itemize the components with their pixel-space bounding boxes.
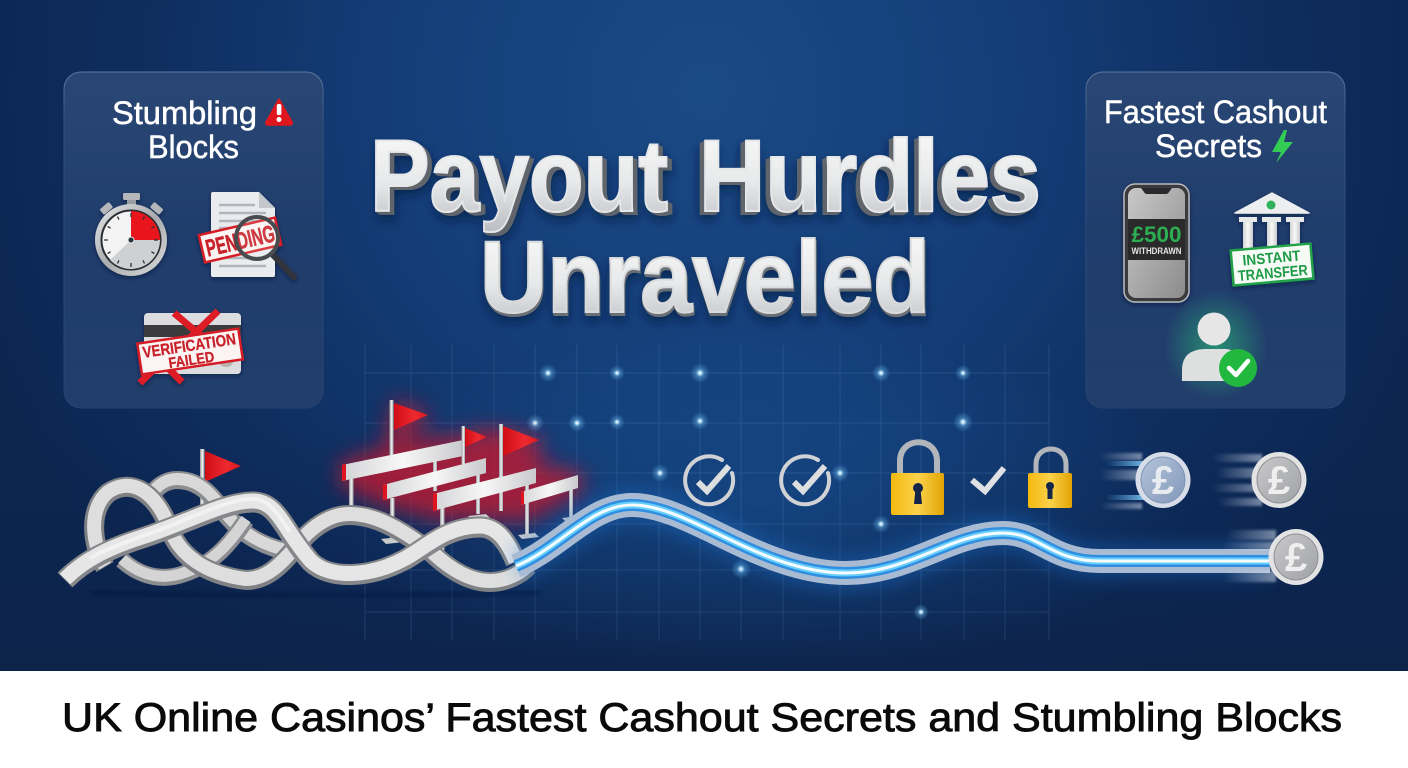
stamp: verification failed — [137, 329, 243, 376]
icon: pound coin silver: £ — [1268, 459, 1290, 503]
hurdle 2 with flag — [381, 426, 490, 544]
caption banner — [0, 671, 1408, 768]
icon: verified user — [1164, 290, 1268, 400]
panel heading: stumbling blocks: Stumbling — [112, 95, 257, 131]
tangled silver ribbon — [65, 449, 540, 596]
icon: pound coin blue — [1100, 452, 1190, 509]
icon: check circle 1 — [685, 456, 733, 504]
hurdles with flags — [342, 400, 581, 553]
red glow behind hurdles — [340, 400, 582, 520]
panel heading: fastest cashout secrets: Fastest Cashout — [1104, 94, 1327, 130]
icon: check mark — [972, 468, 1004, 491]
title: Unraveled — [480, 220, 930, 334]
icon: failed card — [137, 311, 243, 383]
icon: warning triangle — [266, 99, 292, 125]
hurdle 4 — [518, 475, 581, 539]
grid of light lines — [365, 345, 1050, 640]
icon: pound coin silver — [1212, 452, 1306, 508]
icon: pending document with magnifier — [199, 192, 294, 277]
glowing blue path — [516, 505, 1270, 573]
panel: fastest cashout secrets — [1086, 72, 1345, 408]
hurdle 1 with flag — [342, 400, 463, 512]
icon: phone with withdrawal: WITHDRAWN — [1132, 246, 1182, 256]
glowing grid nodes — [526, 363, 973, 620]
icon: lightning bolt — [1272, 130, 1293, 163]
icon: pound coin blue: £ — [1152, 459, 1174, 503]
title: Hurdles — [699, 119, 1041, 233]
panel: stumbling blocks — [64, 72, 323, 408]
icon: pound coin on path — [1222, 529, 1324, 585]
stamp: verification failed: FAILED — [167, 349, 216, 372]
icon: padlock large — [891, 442, 944, 515]
panel heading: fastest cashout secrets: Secrets — [1155, 128, 1262, 164]
sign: instant transfer: INSTANT — [1242, 248, 1301, 270]
caption text: UK Online Casinos’ Fastest Cashout Secrets and Stumbling Blocks — [62, 696, 1342, 740]
title: Payout — [370, 119, 668, 233]
icon: phone with withdrawal: £500 — [1132, 222, 1182, 247]
flag at start of ribbon — [200, 449, 241, 519]
stamp: pending: PENDING — [203, 220, 277, 262]
icon: stopwatch — [95, 193, 167, 276]
sign: instant transfer: TRANSFER — [1237, 262, 1309, 285]
icon: pound coin on path: £ — [1285, 536, 1307, 580]
icon: bank with instant transfer — [1231, 193, 1313, 285]
title — [370, 119, 1041, 334]
stamp: verification failed: VERIFICATION — [142, 331, 237, 362]
sign: instant transfer — [1231, 244, 1313, 285]
panel heading: stumbling blocks: Blocks — [148, 129, 239, 165]
icon: padlock small — [1028, 449, 1072, 508]
icon: check circle 2 — [781, 456, 829, 504]
hurdle 3 with flag — [433, 424, 539, 553]
icon: phone with withdrawal — [1124, 184, 1189, 302]
